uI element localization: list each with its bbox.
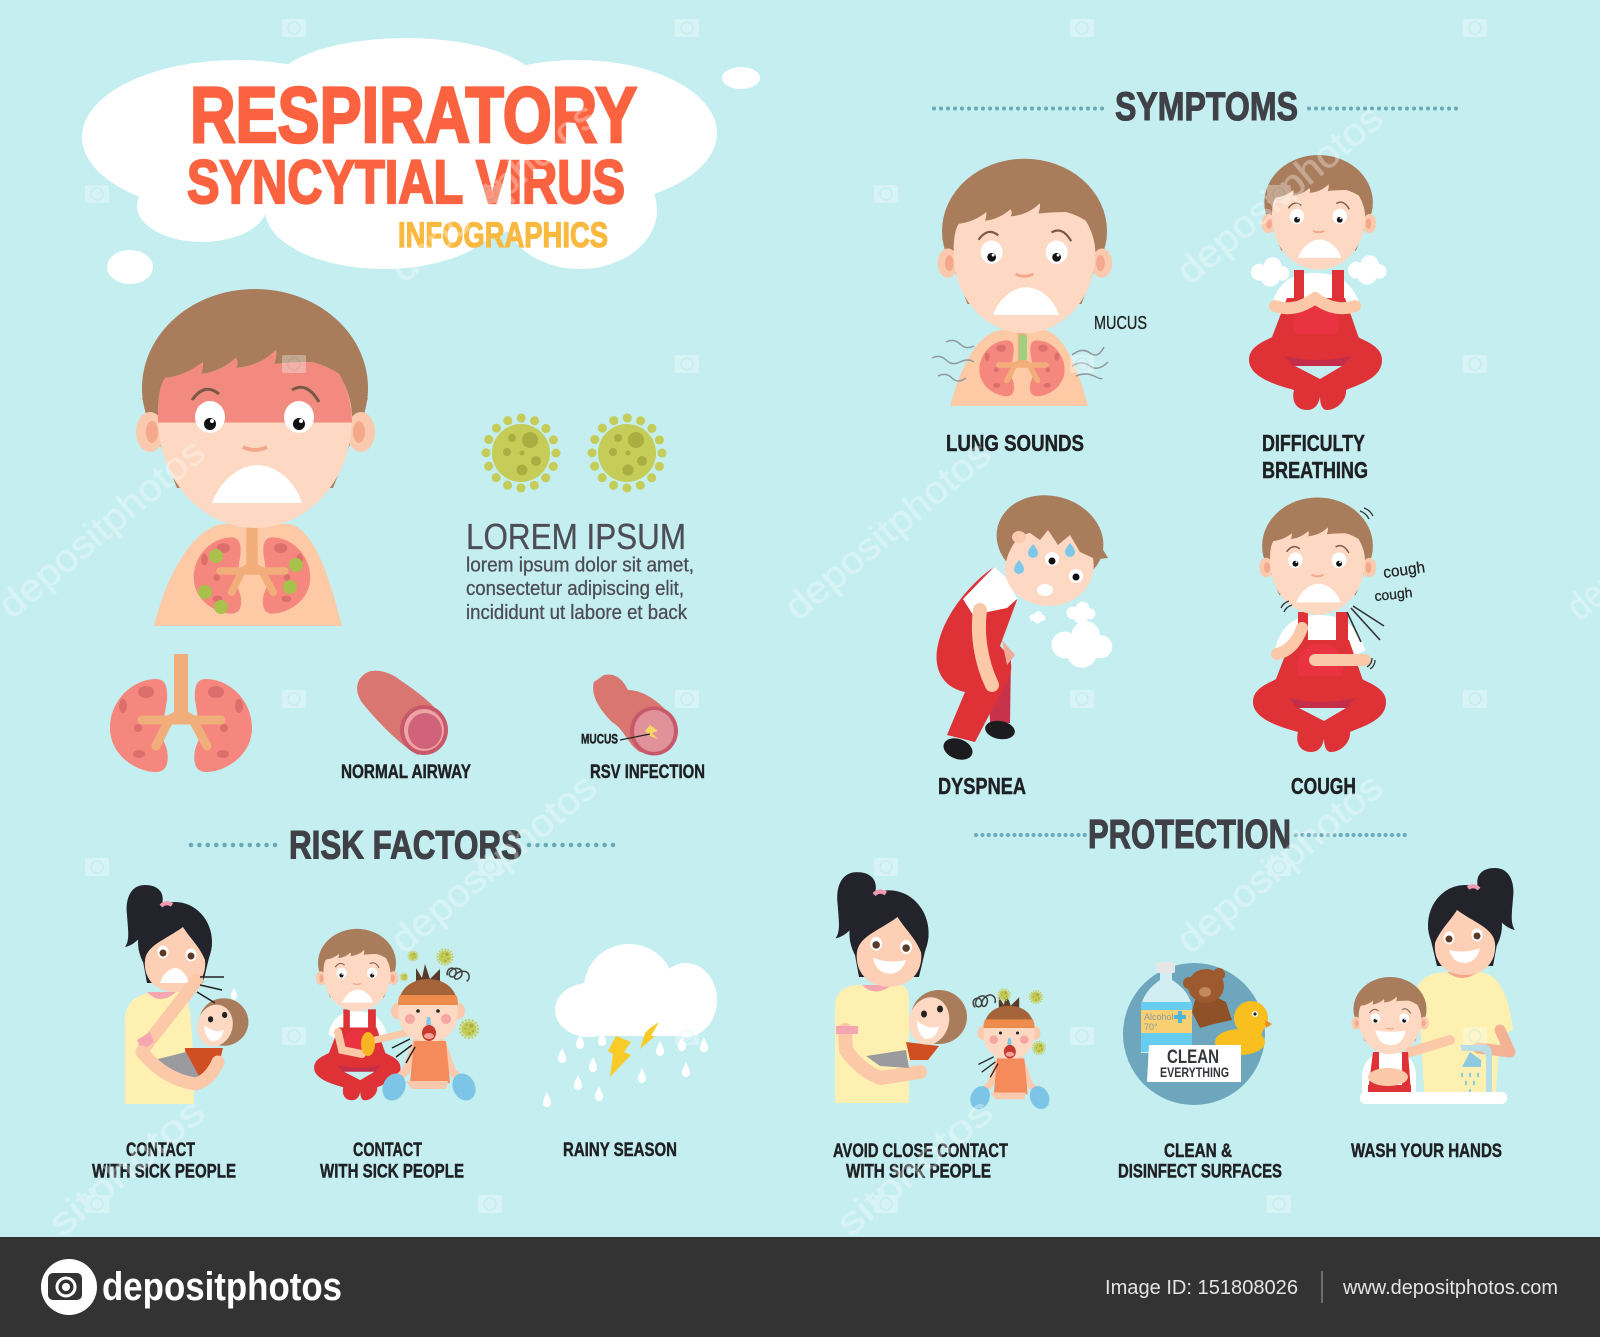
icon: normal airway <box>357 671 448 755</box>
watermarks: depositphotos <box>383 95 605 291</box>
title: RESPIRATORY <box>190 70 637 159</box>
risk: mother sneezing holding baby <box>125 885 248 1104</box>
label: contact with sick people 1: CONTACT <box>126 1140 195 1161</box>
protection: washing hands with mother <box>1352 868 1515 1104</box>
symptom: difficulty breathing boy <box>1249 155 1386 410</box>
heading: protection: PROTECTION <box>1088 811 1291 857</box>
protection: clean everything icon: CLEAN <box>1167 1047 1219 1068</box>
label: contact with sick people 1: WITH SICK PEOPLE <box>92 1162 236 1182</box>
label: contact with sick people 2: WITH SICK PEOPLE <box>320 1162 464 1182</box>
heading: risk factors: RISK FACTORS <box>289 824 522 868</box>
symptom: dyspnea boy bending <box>937 484 1114 764</box>
footer bar: www.depositphotos.com <box>1342 1277 1558 1299</box>
lorem ipsum text block: LOREM IPSUM <box>466 516 686 557</box>
title: INFOGRAPHICS <box>398 216 608 255</box>
virus icons <box>486 418 662 488</box>
label: cough: COUGH <box>1291 773 1356 799</box>
main sick boy with infected lungs <box>136 289 375 626</box>
label: difficulty breathing: DIFFICULTY <box>1262 430 1365 456</box>
watermarks: depositphotos <box>383 766 605 962</box>
lorem ipsum text block: incididunt ut labore et back <box>466 602 688 624</box>
label: RSV infection: RSV INFECTION <box>590 762 705 783</box>
heading: symptoms: SYMPTOMS <box>1115 85 1298 129</box>
label: wash your hands: WASH YOUR HANDS <box>1351 1141 1502 1162</box>
protection: clean everything icon: Alcohol <box>1144 1012 1174 1022</box>
label: normal airway: NORMAL AIRWAY <box>341 762 471 783</box>
risk: rain cloud with lightning <box>543 944 717 1107</box>
icon: RSV infection airway <box>581 675 678 756</box>
label: clean and disinfect surfaces: CLEAN & <box>1164 1141 1232 1162</box>
label: clean and disinfect surfaces <box>1118 1141 1282 1182</box>
symptom: lung sounds boy <box>932 159 1112 406</box>
lorem ipsum text block <box>466 516 694 624</box>
icon: lungs <box>110 654 252 772</box>
watermarks: depositphotos <box>777 433 999 629</box>
protection: clean everything icon: 70° <box>1144 1022 1158 1032</box>
footer bar: Image ID: 151808026 <box>1105 1277 1298 1299</box>
label: contact with sick people 2: CONTACT <box>353 1140 422 1161</box>
label: difficulty breathing: BREATHING <box>1262 457 1368 483</box>
watermarks: depositphotos <box>1169 97 1391 293</box>
label: clean and disinfect surfaces: DISINFECT SURFACES <box>1118 1162 1282 1182</box>
thought cloud <box>82 38 760 284</box>
title <box>187 70 637 255</box>
label: avoid close contact <box>833 1141 1008 1182</box>
label: dyspnea: DYSPNEA <box>938 773 1026 799</box>
footer bar: depositphotos <box>102 1265 342 1309</box>
label: cough small texts: cough <box>1382 559 1426 582</box>
label: contact with sick people 1 <box>92 1140 236 1182</box>
protection: clean everything icon <box>1123 962 1272 1105</box>
label: mucus: MUCUS <box>1094 313 1147 333</box>
lorem ipsum text block: lorem ipsum dolor sit amet, <box>466 554 694 576</box>
footer bar <box>0 1237 1600 1337</box>
label: cough small texts <box>1374 559 1426 604</box>
label: avoid close contact: WITH SICK PEOPLE <box>846 1162 991 1182</box>
label: avoid close contact: AVOID CLOSE CONTACT <box>833 1141 1008 1162</box>
watermarks: sitphotos <box>829 1091 1001 1245</box>
label: cough small texts: cough <box>1374 584 1413 604</box>
label: difficulty breathing <box>1262 430 1368 483</box>
title: SYNCYTIAL VIRUS <box>187 148 625 216</box>
risk: boy sitting next to sick baby <box>314 929 480 1104</box>
protection: clean everything icon: EVERYTHING <box>1160 1064 1229 1080</box>
protection: mother holding baby away from sick baby <box>835 872 1053 1112</box>
watermarks: depositphotos <box>1169 766 1391 962</box>
label: lung sounds: LUNG SOUNDS <box>946 430 1084 456</box>
symptom: coughing boy <box>1253 497 1386 752</box>
label: contact with sick people 2 <box>320 1140 464 1182</box>
label: rainy season: RAINY SEASON <box>563 1140 677 1161</box>
icon: RSV infection airway: MUCUS <box>581 731 618 747</box>
lorem ipsum text block: consectetur adipiscing elit, <box>466 578 684 600</box>
watermarks: sitphotos <box>41 1091 213 1245</box>
